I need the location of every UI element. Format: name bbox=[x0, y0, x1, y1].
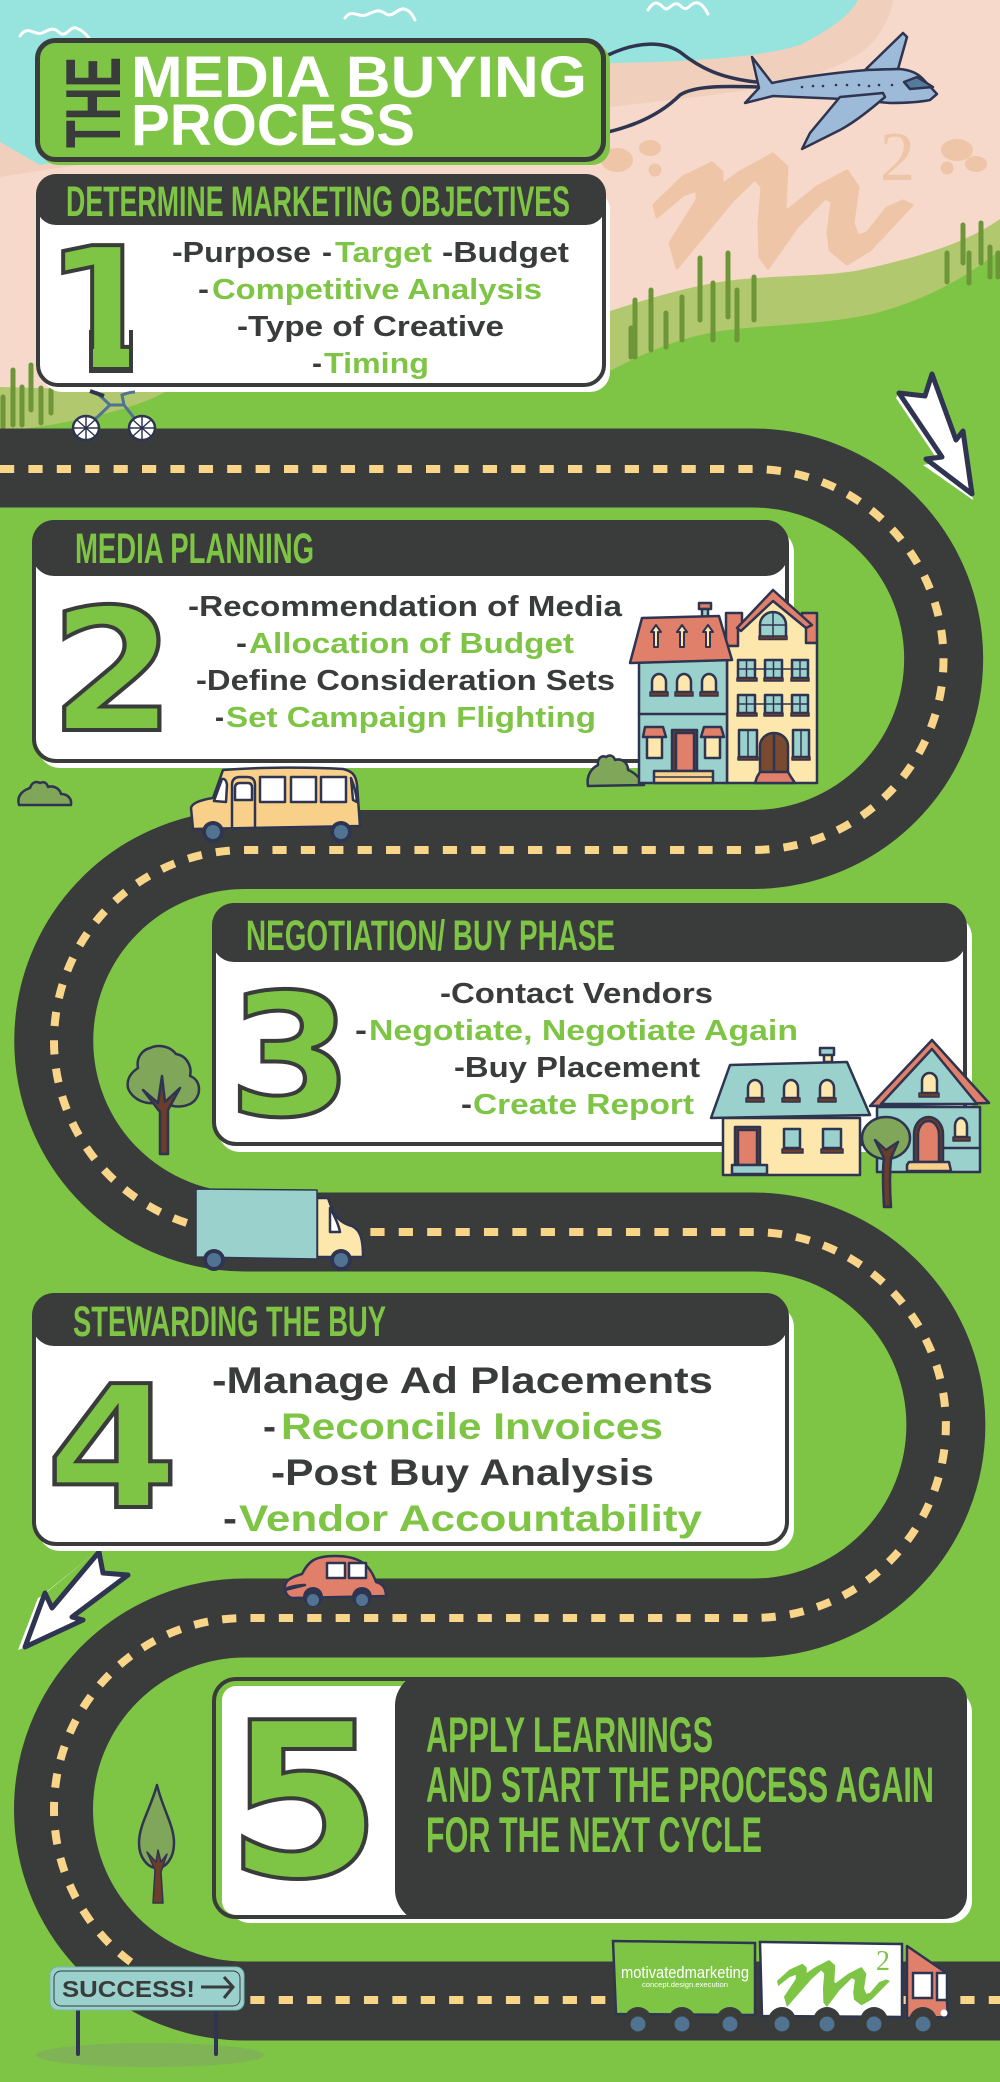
panel: step 3 bbox=[212, 903, 972, 1156]
cottages bbox=[711, 1040, 989, 1207]
step 1 list: -Type of Creative bbox=[237, 311, 504, 343]
success sign: SUCCESS! bbox=[62, 1976, 195, 2002]
watermark m2 logo: 2 bbox=[880, 119, 915, 196]
panel: step 5 bbox=[214, 1676, 972, 1927]
step 3 list: Create Report bbox=[473, 1089, 694, 1121]
step 1 list: Competitive Analysis bbox=[212, 274, 542, 306]
step 2 list: Allocation of Budget bbox=[249, 628, 574, 660]
truck logo bbox=[777, 1946, 890, 2007]
step 4 list bbox=[212, 1360, 713, 1539]
step 1 list: -Budget bbox=[442, 237, 569, 269]
step 1 heading: DETERMINE MARKETING OBJECTIVES bbox=[66, 178, 570, 226]
school bus bbox=[191, 768, 360, 843]
white wave squiggles in the water bbox=[20, 3, 708, 38]
step 1 list: Target bbox=[335, 237, 432, 269]
step 1 list: -Purpose bbox=[172, 237, 311, 269]
tree left of step 3 bbox=[128, 1046, 199, 1154]
step 1 number: 1 bbox=[44, 212, 162, 410]
step 1 list bbox=[172, 237, 569, 380]
step 2 list: - bbox=[236, 628, 247, 660]
red car bbox=[285, 1556, 386, 1607]
step 2 list: -Define Consideration Sets bbox=[196, 665, 615, 697]
panel: step 1 bbox=[36, 174, 610, 410]
success sign bbox=[50, 1967, 244, 2054]
step 2 heading: MEDIA PLANNING bbox=[75, 525, 314, 573]
step 4 heading: STEWARDING THE BUY bbox=[73, 1298, 386, 1346]
step 2 list: -Recommendation of Media bbox=[188, 591, 623, 623]
sign arrow bbox=[201, 1977, 233, 1998]
step 4 list: - bbox=[263, 1406, 276, 1447]
delivery truck: concept.design.execution bbox=[642, 1982, 728, 1989]
step 2 list: Set Campaign Flighting bbox=[226, 702, 596, 734]
truck logo: 2 bbox=[876, 1946, 890, 1977]
step 5 message: FOR THE NEXT CYCLE bbox=[426, 1807, 762, 1863]
title panel bbox=[38, 40, 610, 165]
step 5 number: 5 bbox=[226, 1676, 382, 1927]
step 3 list: -Buy Placement bbox=[454, 1052, 700, 1084]
step 1 list: - bbox=[198, 274, 209, 306]
step 5 message: APPLY LEARNINGS bbox=[426, 1707, 713, 1763]
step 3 number: 3 bbox=[228, 958, 353, 1156]
airplane illustration bbox=[745, 33, 937, 149]
step 2 list: - bbox=[215, 702, 224, 734]
townhouses bbox=[630, 590, 817, 783]
step 4 number: 4 bbox=[46, 1350, 179, 1548]
step 1 list: - bbox=[322, 237, 332, 269]
delivery truck bbox=[613, 1941, 948, 2035]
bicycle illustration bbox=[73, 391, 155, 440]
step 4 list: Vendor Accountability bbox=[239, 1498, 702, 1539]
title panel: PROCESS bbox=[131, 93, 415, 158]
ground shadow under sign bbox=[36, 2043, 264, 2067]
bush small left bbox=[18, 782, 71, 805]
panel: step 2 bbox=[32, 520, 794, 771]
box truck bbox=[196, 1189, 363, 1271]
watermark m2 logo bbox=[601, 119, 987, 268]
title panel: MEDIA BUYING bbox=[131, 45, 587, 110]
cone tree bbox=[139, 1785, 174, 1903]
step 2 number: 2 bbox=[50, 573, 175, 771]
winding road bbox=[0, 468, 1000, 2001]
step 4 list: Reconcile Invoices bbox=[281, 1406, 663, 1447]
step 3 list bbox=[355, 978, 798, 1121]
step 3 list: - bbox=[461, 1089, 472, 1121]
step 4 list: -Manage Ad Placements bbox=[212, 1360, 713, 1401]
arrow: downward right bbox=[896, 374, 973, 500]
panel: step 4 bbox=[32, 1293, 794, 1551]
step 3 list: Negotiate, Negotiate Again bbox=[369, 1015, 798, 1047]
step 4 list: -Post Buy Analysis bbox=[271, 1452, 654, 1493]
step 3 heading: NEGOTIATION/ BUY PHASE bbox=[246, 912, 615, 960]
step 5 message bbox=[426, 1707, 934, 1863]
step 3 list: -Contact Vendors bbox=[440, 978, 713, 1010]
step 3 list: - bbox=[355, 1015, 367, 1047]
bush by townhouses bbox=[588, 756, 644, 786]
step 1 list: Timing bbox=[324, 348, 429, 380]
step 1 number bbox=[61, 243, 133, 373]
step 4 list: - bbox=[223, 1498, 237, 1539]
step 1 list: - bbox=[312, 348, 322, 380]
grass tufts bbox=[3, 223, 998, 427]
streamers from plane to title bbox=[608, 44, 759, 132]
truck side text: motivatedmarketing bbox=[621, 1963, 749, 1982]
step 2 list bbox=[188, 591, 623, 734]
arrow: downward left bbox=[18, 1552, 128, 1650]
